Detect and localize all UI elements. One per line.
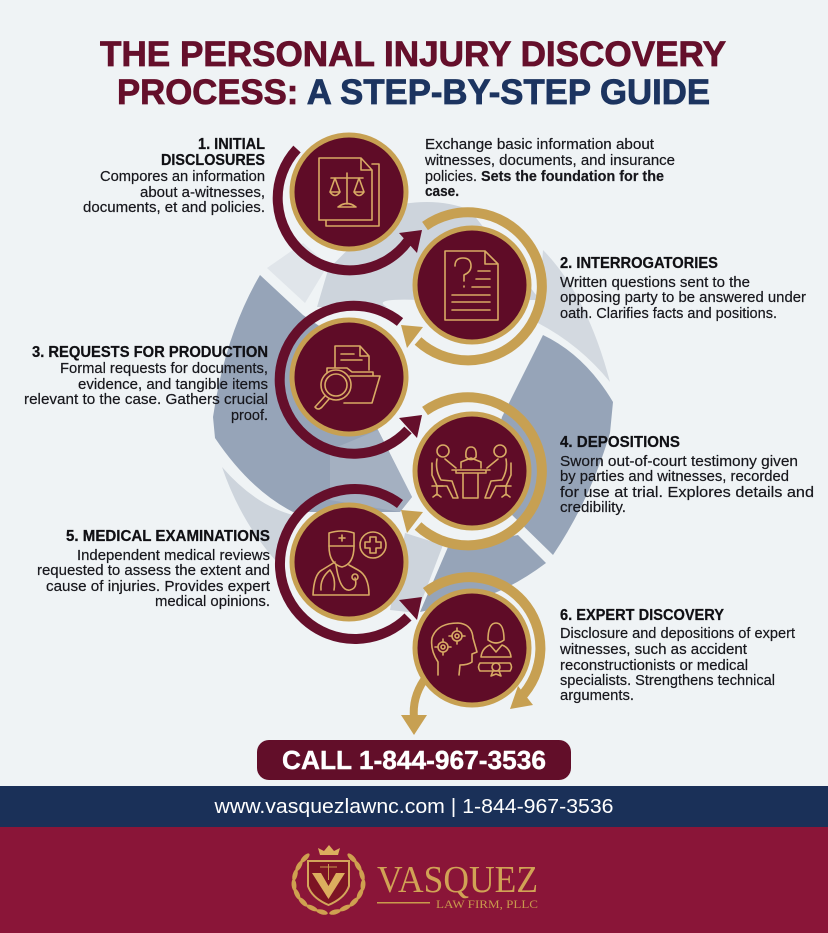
step 1 left text: initial disclosures: Compores an information (100, 168, 265, 185)
step 5 text: medical examinations: medical opinions. (155, 593, 270, 610)
step 5 text: medical examinations: requested to assess the extent and (37, 562, 270, 579)
contact band: www.vasquezlawnc.com | 1-844-967-3536 (213, 796, 614, 818)
arrow: step 6 right curve (426, 577, 540, 709)
step 4 text: depositions: credibility. (560, 499, 626, 516)
step 5 text: medical examinations: Independent medical reviews (77, 547, 270, 564)
step 4 text: depositions (560, 434, 814, 516)
step 6 text: expert discovery: reconstructionists or medical (560, 657, 748, 674)
title: PROCESS: A STEP-BY-STEP GUIDE (117, 73, 710, 112)
title: THE PERSONAL INJURY DISCOVERY (100, 35, 726, 74)
step 6 text: expert discovery (559, 607, 796, 704)
step 3 text: requests for production: Formal requests for documents, (60, 360, 268, 377)
arrow: step 2 to 3 (401, 212, 542, 360)
icon: deposition table (415, 414, 529, 528)
background cycle arrows (213, 202, 613, 613)
step 1 left text: initial disclosures: about a-witnesses, (140, 184, 265, 201)
step 4 text: depositions: for use at trial. Explores details and (560, 484, 814, 501)
step 3 text: requests for production: proof. (231, 407, 268, 424)
step 2 text: interrogatories: oath. Clarifies facts and positions. (560, 305, 777, 322)
logo: wordmark: LAW FIRM, PLLC (436, 897, 538, 911)
step 6 text: expert discovery: Disclosure and depositions of expert (560, 625, 796, 642)
arrow: step 1 to 2 (278, 149, 422, 270)
arrow: step 6 downward (401, 680, 427, 735)
logo: crest (291, 845, 366, 916)
step 4 text: depositions: Sworn out-of-court testimony given (560, 453, 798, 470)
call button (257, 740, 571, 780)
contact band (0, 786, 828, 827)
step 5 text: medical examinations (37, 528, 271, 610)
step 6 text: expert discovery: specialists. Strengthens technical (560, 672, 775, 689)
icon: folder with magnifier (292, 320, 406, 434)
step 1 right text: case. (425, 183, 459, 200)
arrow: step 4 to 5 (401, 397, 542, 545)
step 2 text: interrogatories (560, 255, 806, 322)
step 2 text: interrogatories: opposing party to be answered under (560, 289, 806, 306)
step 3 text: requests for production: relevant to the case. Gathers crucial (24, 391, 268, 408)
step 6 text: expert discovery: arguments. (560, 687, 634, 704)
step 1 left text: initial disclosures (83, 136, 265, 216)
step 3 text: requests for production (24, 344, 268, 424)
step 4 text: depositions: by parties and witnesses, recorded (560, 468, 789, 485)
step 1 right text (424, 136, 675, 200)
step 1 right text: Exchange basic information about (425, 136, 655, 153)
step 3 text: requests for production: 3. REQUESTS FOR PRODUCTION (32, 344, 268, 361)
step 1 left text: initial disclosures: DISCLOSURES (161, 152, 265, 169)
icon: question document (415, 228, 529, 342)
step 1 left text: initial disclosures: 1. INITIAL (198, 136, 265, 153)
step 4 text: depositions: 4. DEPOSITIONS (560, 434, 680, 451)
icon: doctor with medical cross (292, 505, 406, 619)
step 1 left text: initial disclosures: documents, et and policies. (83, 199, 265, 216)
step 3 text: requests for production: evidence, and tangible items (78, 376, 268, 393)
icon: expert with gears and diploma (415, 591, 529, 705)
step 5 text: medical examinations: cause of injuries. Provides expert (46, 578, 271, 595)
step 1 right text: witnesses, documents, and insurance (424, 152, 675, 169)
step 6 text: expert discovery: 6. EXPERT DISCOVERY (560, 607, 725, 624)
call button: CALL 1-844-967-3536 (282, 745, 546, 775)
step 2 text: interrogatories: Written questions sent to the (560, 274, 750, 291)
step 1 right text: policies. Sets the foundation for the (425, 168, 664, 185)
arrow: step 5 to 6 (280, 489, 422, 639)
logo: wordmark: VASQUEZ (377, 859, 538, 901)
title (100, 35, 726, 112)
arrow: step 3 to 4 (280, 306, 422, 454)
step 5 text: medical examinations: 5. MEDICAL EXAMINATIONS (66, 528, 270, 545)
footer band (0, 827, 828, 933)
step 2 text: interrogatories: 2. INTERROGATORIES (560, 255, 718, 272)
icon: legal document with scales (292, 135, 406, 249)
step 6 text: expert discovery: witnesses, such as accident (559, 641, 748, 658)
